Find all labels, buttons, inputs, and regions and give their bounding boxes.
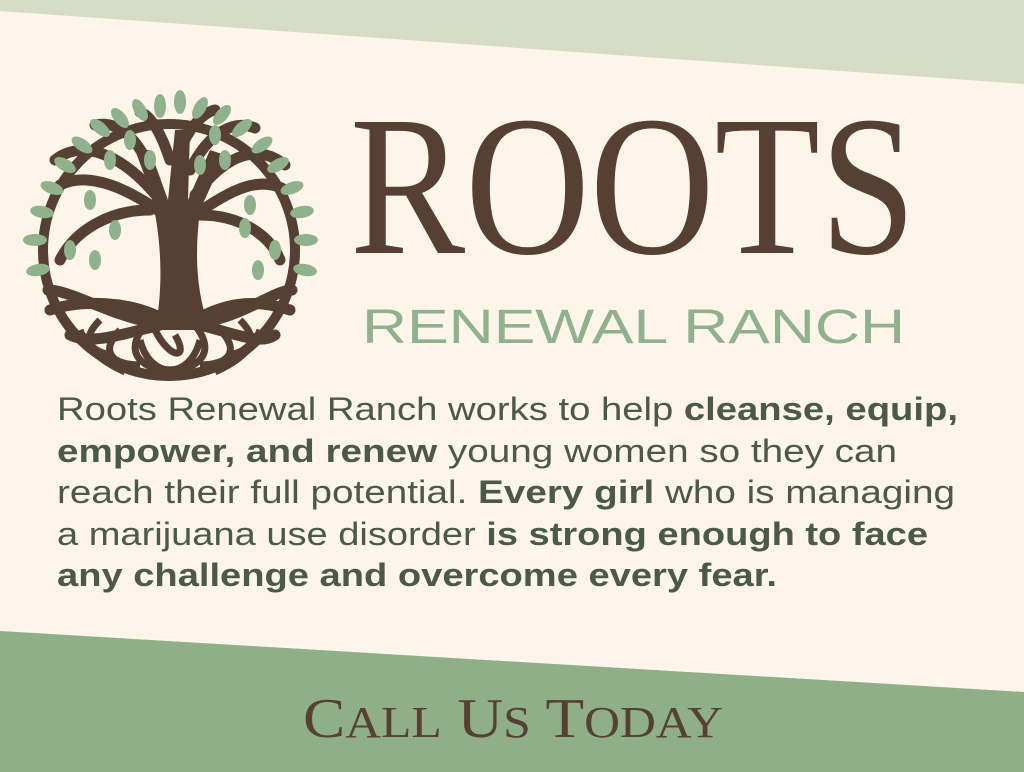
text block: mission paragraph: any challenge and overcome every fear. bbox=[57, 557, 777, 593]
subtitle: RENEWAL RANCH: RENEWAL RANCH bbox=[362, 301, 905, 354]
icon: tree of life logo bbox=[23, 90, 318, 376]
text block: mission paragraph: empower, and renew young women so they can bbox=[57, 433, 897, 469]
text block: mission paragraph: Roots Renewal Ranch works to help cleanse, equip, bbox=[57, 391, 958, 427]
call to action: CALL US TODAY bbox=[303, 688, 723, 750]
text block: mission paragraph bbox=[57, 391, 958, 593]
bottom green band bbox=[0, 631, 1024, 772]
text block: mission paragraph: reach their full potential. Every girl who is managing bbox=[57, 474, 955, 510]
title: ROOTS: ROOTS bbox=[350, 76, 916, 297]
text block: mission paragraph: a marijuana use disorder is strong enough to face bbox=[57, 516, 928, 552]
